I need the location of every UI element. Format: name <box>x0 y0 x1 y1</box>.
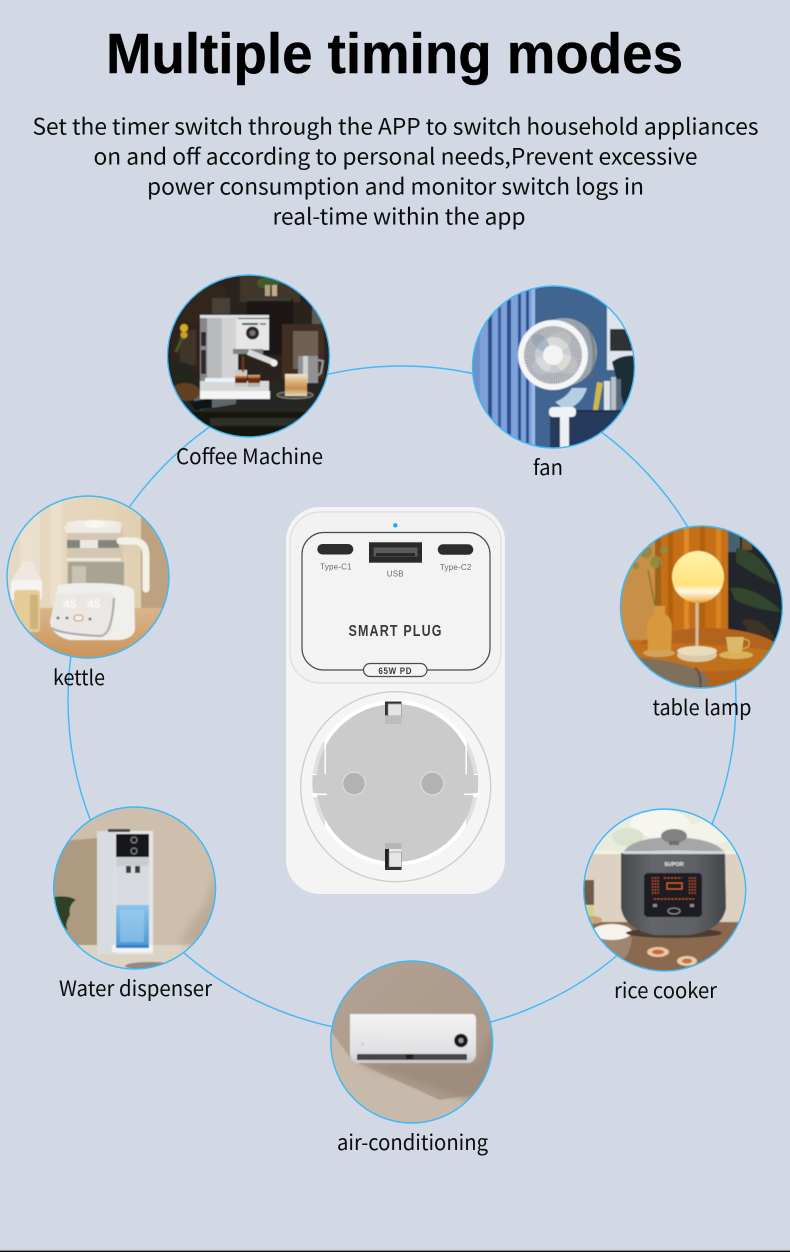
label: table lamp: table lamp <box>652 692 752 722</box>
socket <box>301 692 491 882</box>
port: type-c2 <box>438 544 473 572</box>
dispenser body <box>114 830 154 954</box>
lamp <box>696 600 698 650</box>
label: air-conditioning: air-conditioning <box>337 1127 488 1157</box>
image: water dispenser <box>52 806 216 970</box>
side notches <box>310 741 482 833</box>
label: water dispenser: Water dispenser <box>59 973 213 1003</box>
counter <box>190 378 324 408</box>
image: kettle: 45 <box>87 597 101 611</box>
indicator light <box>393 523 397 528</box>
port: type-c2: Type-C2 <box>440 563 472 572</box>
plug body <box>286 507 505 894</box>
vase <box>643 649 675 657</box>
upper panel <box>290 512 501 683</box>
image: kettle: 45 <box>63 597 77 611</box>
power badge <box>364 664 427 676</box>
port: type-c1 <box>317 544 353 572</box>
image: rice cooker: SUPOR <box>664 862 684 868</box>
sofa <box>638 657 710 688</box>
product: smart plug <box>286 507 505 894</box>
stand <box>555 388 587 410</box>
bread <box>170 383 200 401</box>
label: fan: fan <box>533 452 563 482</box>
title: Multiple timing modes <box>106 22 683 86</box>
power badge: 65W PD <box>378 665 412 676</box>
base <box>50 583 135 640</box>
books <box>593 382 603 410</box>
description text <box>32 110 758 232</box>
socket holes <box>342 772 366 796</box>
latte <box>277 392 313 398</box>
top ground clip <box>385 702 402 724</box>
label: coffee machine: Coffee Machine <box>176 441 323 471</box>
unit <box>350 1014 476 1063</box>
fan head <box>554 317 598 386</box>
image: rice cooker <box>583 808 746 972</box>
cooker <box>626 928 722 938</box>
port: usb <box>369 542 422 578</box>
image: coffee machine <box>165 272 335 442</box>
label: rice cooker: rice cooker <box>614 975 718 1005</box>
description text: on and off according to personal needs,Prevent excessive <box>94 140 698 172</box>
figs <box>647 947 669 957</box>
cup <box>719 651 753 659</box>
port: type-c1: Type-C1 <box>320 562 352 572</box>
plant <box>54 896 76 930</box>
port: usb: USB <box>387 570 404 578</box>
image: fan <box>470 284 640 456</box>
kettle glass <box>67 528 123 584</box>
image: kettle <box>6 495 170 659</box>
bowl of rice <box>602 936 632 959</box>
image: air conditioner <box>330 960 494 1124</box>
milk pitcher <box>298 356 318 383</box>
handle <box>120 541 146 589</box>
machine base <box>200 381 269 391</box>
port panel <box>302 532 490 670</box>
description text: power consumption and monitor switch logs in <box>147 170 644 202</box>
label: kettle: kettle <box>53 662 105 692</box>
table <box>640 628 774 686</box>
cabinet <box>550 412 620 448</box>
image: table lamp <box>620 525 784 689</box>
shot glasses <box>235 370 247 387</box>
bottle <box>11 561 42 582</box>
description text: real-time within the app <box>272 200 526 232</box>
machine head <box>236 319 269 350</box>
machine column <box>200 316 208 388</box>
connecting ring <box>68 366 736 1034</box>
dried plant <box>633 546 668 569</box>
description text: Set the timer switch through the APP to switch household appliances <box>32 110 758 142</box>
flowers <box>176 338 182 352</box>
picture <box>607 306 637 370</box>
jar <box>582 880 594 905</box>
bottom ground clip <box>385 843 402 870</box>
product name: SMART PLUG <box>348 622 442 639</box>
